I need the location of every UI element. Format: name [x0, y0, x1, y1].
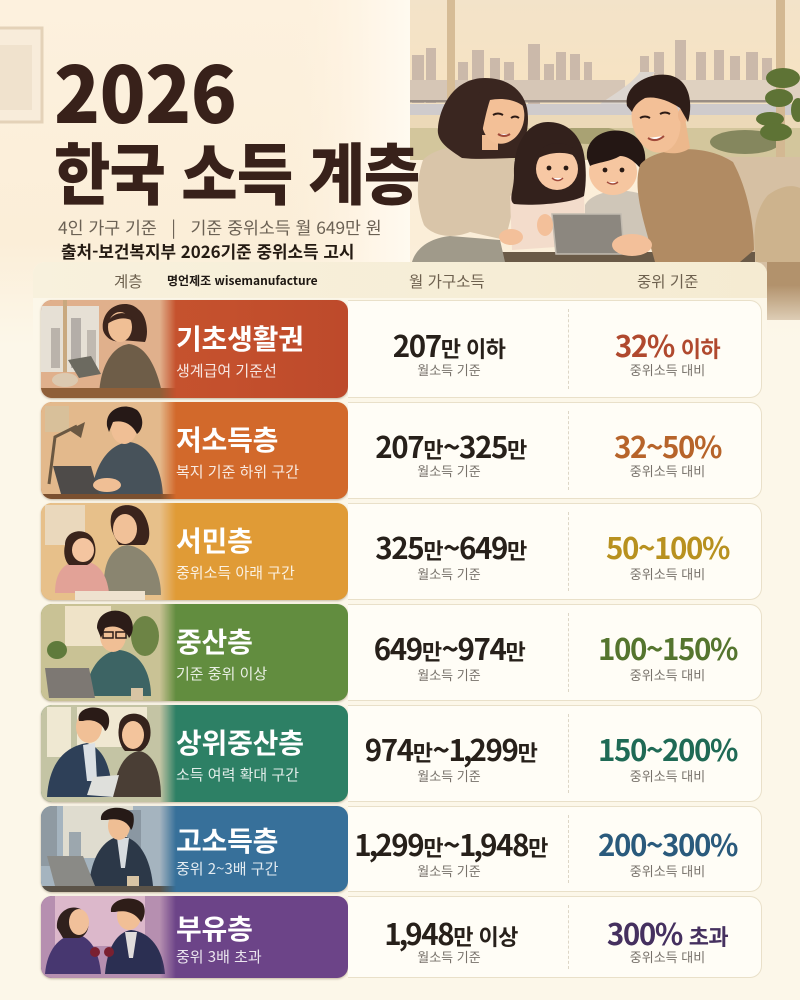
tier name: 저소득층 — [176, 419, 278, 459]
median value: 300% 초과 — [607, 912, 728, 954]
illustration: business couple — [41, 705, 175, 802]
family — [412, 75, 754, 262]
subtitle: 4인 가구 기준 | 기준 중위소득 월 649만 원 — [58, 214, 382, 239]
median caption: 중위소득 대비 — [630, 861, 705, 880]
illustration: couple with wine — [41, 896, 174, 978]
income value: 974만~1,299만 — [365, 728, 537, 770]
row 7 label: 부유층 — [41, 896, 348, 978]
column head: income: 월 가구소득 — [409, 270, 485, 292]
row 1 label: 기초생활권 — [41, 300, 348, 398]
income caption: 월소득 기준 — [417, 461, 481, 480]
income caption: 월소득 기준 — [417, 766, 481, 785]
tier name: 기초생활권 — [176, 318, 304, 358]
father — [626, 75, 754, 262]
income value: 207만~325만 — [375, 425, 527, 467]
row 1 values — [348, 300, 762, 398]
row 4 values — [348, 604, 762, 701]
tier name: 중산층 — [176, 621, 253, 661]
tier description: 기준 중위 이상 — [176, 663, 267, 684]
row 5 label: 상위중산층 — [41, 705, 348, 802]
plant — [756, 68, 800, 141]
title year: 2026 — [54, 34, 236, 146]
median value: 100~150% — [598, 627, 737, 669]
row 7 values — [348, 896, 762, 978]
illustration: man at laptop — [41, 402, 174, 499]
window with city view — [410, 0, 800, 160]
row 4 label: 중산층 — [41, 604, 348, 701]
girl — [510, 122, 586, 250]
illustration: man with glasses at laptop — [41, 604, 174, 701]
income caption: 월소득 기준 — [417, 360, 481, 379]
tier name: 서민층 — [176, 520, 253, 560]
median value: 50~100% — [606, 526, 729, 568]
income caption: 월소득 기준 — [417, 564, 481, 583]
row 6 label: 고소득층 — [41, 806, 348, 892]
median value: 150~200% — [598, 728, 737, 770]
tier description: 중위 3배 초과 — [176, 946, 262, 967]
income value: 1,948만 이상 — [384, 912, 518, 954]
median value: 200~300% — [598, 823, 737, 865]
tier name: 고소득층 — [176, 820, 278, 860]
tier description: 복지 기준 하위 구간 — [176, 461, 299, 482]
title — [54, 34, 419, 219]
tablet — [552, 214, 624, 254]
table header — [33, 262, 767, 298]
source note: 출처-보건복지부 2026기준 중위소득 고시 — [61, 238, 354, 263]
median caption: 중위소득 대비 — [630, 766, 705, 785]
column head: median: 중위 기준 — [637, 270, 698, 292]
income value: 649만~974만 — [374, 627, 525, 669]
tier name: 상위중산층 — [176, 722, 304, 762]
watermark: 명언제조 wisemanufacture — [167, 272, 318, 289]
income caption: 월소득 기준 — [417, 665, 481, 684]
tier description: 중위소득 아래 구간 — [176, 562, 295, 583]
row 3 values — [348, 503, 762, 600]
tier description: 중위 2~3배 구간 — [176, 858, 278, 879]
tier name: 부유층 — [176, 908, 253, 948]
row 2 label: 저소득층 — [41, 402, 348, 499]
boy — [585, 130, 660, 245]
hands — [499, 229, 523, 245]
row 3 label: 서민층 — [41, 503, 348, 600]
income caption: 월소득 기준 — [417, 861, 481, 880]
illustration: woman with tablet — [41, 300, 174, 398]
median value: 32~50% — [614, 425, 721, 467]
row 2 values — [348, 402, 762, 499]
median caption: 중위소득 대비 — [630, 564, 705, 583]
row 5 values — [348, 705, 762, 802]
median caption: 중위소득 대비 — [630, 360, 705, 379]
income value: 325만~649만 — [375, 526, 527, 568]
median value: 32% 이하 — [615, 324, 720, 366]
mother — [412, 78, 530, 262]
hero background illustration — [0, 0, 800, 320]
illustration: mother and daughter — [41, 503, 174, 600]
illustration: man in suit at laptop — [41, 806, 174, 892]
income caption: 월소득 기준 — [417, 947, 481, 966]
income value: 207만 이하 — [393, 324, 505, 366]
tier description: 생계급여 기준선 — [176, 360, 277, 381]
median caption: 중위소득 대비 — [630, 947, 705, 966]
panel: income table — [33, 262, 767, 986]
tier description: 소득 여력 확대 구간 — [176, 764, 299, 785]
column head: tier: 계층 — [114, 270, 143, 292]
median caption: 중위소득 대비 — [630, 665, 705, 684]
median caption: 중위소득 대비 — [630, 461, 705, 480]
income value: 1,299만~1,948만 — [354, 823, 548, 865]
sofa — [480, 157, 800, 320]
picture frame — [0, 28, 42, 122]
title heading: 한국 소득 계층 — [54, 122, 419, 219]
row 6 values — [348, 806, 762, 892]
